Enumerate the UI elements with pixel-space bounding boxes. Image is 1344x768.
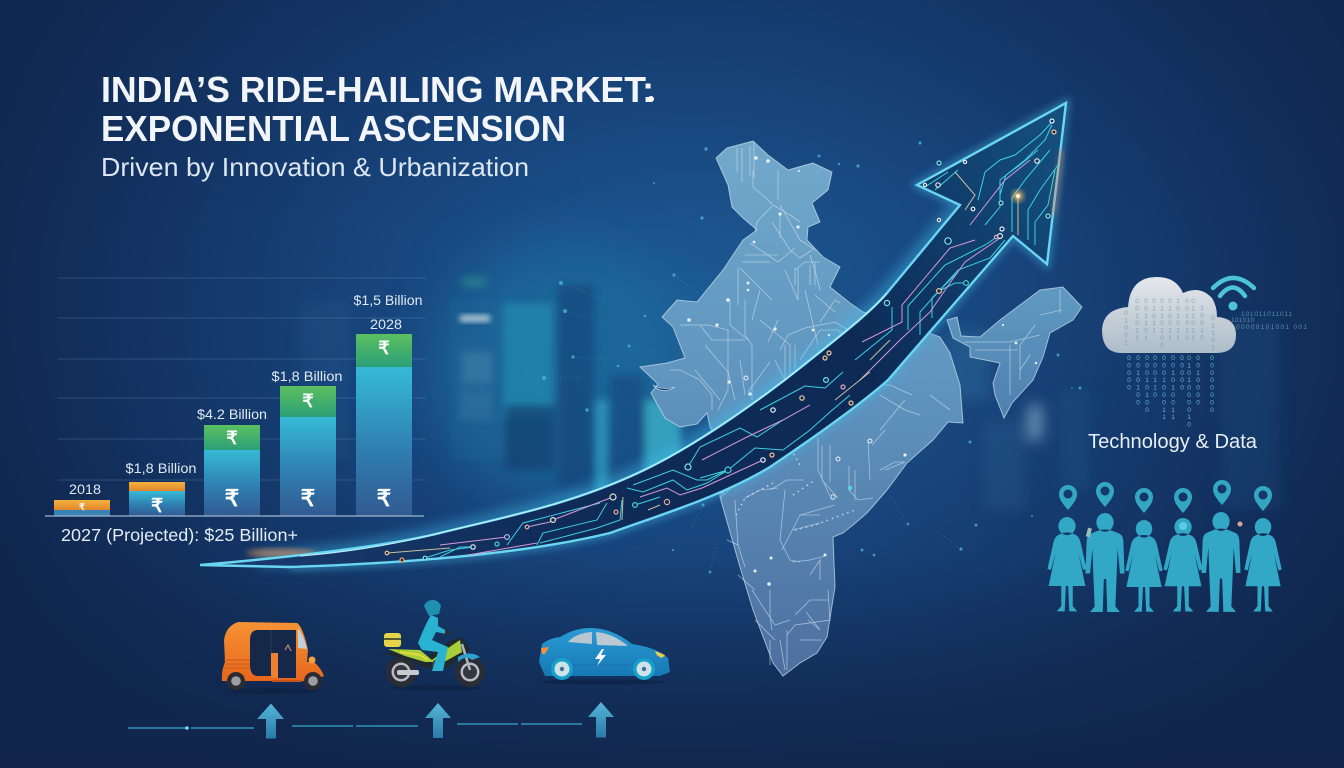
bar value labels: 2018 xyxy=(69,482,101,497)
map: north-east xyxy=(947,287,1082,418)
arrow up 2 xyxy=(425,703,451,738)
bar 3: ₹ xyxy=(225,485,240,511)
binary inside cloud: 010011 xyxy=(1166,298,1174,342)
binary inside cloud: 01101 xyxy=(1210,315,1216,352)
bar value labels: $4.2 Billion xyxy=(197,407,267,422)
bar 4: ₹ xyxy=(301,485,316,511)
arrow bright edge xyxy=(300,293,887,556)
bar value labels xyxy=(69,293,422,497)
bar 5: ₹ xyxy=(377,485,392,511)
binary rain: 00000 xyxy=(1178,355,1186,392)
bar 4: ₹ xyxy=(302,391,314,411)
arrow glow xyxy=(260,205,960,560)
arrow up 3 xyxy=(588,702,614,738)
arrow circuit nodes xyxy=(385,119,1056,562)
blurred city skyline xyxy=(300,240,1280,510)
progress line and arrows xyxy=(128,702,614,738)
map nodes xyxy=(687,156,1037,586)
map dashed routes xyxy=(736,430,855,530)
bar 5: ₹ xyxy=(378,338,390,358)
bar value labels: $1,8 Billion xyxy=(126,461,196,476)
orange flare xyxy=(1053,150,1062,215)
arrow circuit traces xyxy=(387,122,1058,558)
cloud and data icon xyxy=(1102,277,1307,429)
growth arrow xyxy=(200,103,1066,567)
location pins xyxy=(1059,480,1272,513)
bar 5 xyxy=(356,334,412,516)
technology label: Technology & Data xyxy=(1088,430,1258,453)
map: gulf xyxy=(653,385,675,391)
binary inside cloud: 011011 xyxy=(1190,298,1196,342)
binary rain: 0101000010 xyxy=(1186,355,1192,429)
bar 3: ₹ xyxy=(226,428,238,448)
binary inside cloud xyxy=(1122,298,1216,352)
binary rain: 0010000 xyxy=(1194,355,1202,407)
binary inside cloud: 001011 xyxy=(1134,298,1140,342)
binary rain: 00000000 xyxy=(1208,355,1216,414)
data bits: 00000101001 001 xyxy=(1236,324,1307,331)
binary rain: 00000 xyxy=(1126,355,1132,392)
orange tail flare xyxy=(246,549,318,557)
projection label: 2027 (Projected): $25 Billion+ xyxy=(61,525,298,545)
title: INDIA’S RIDE-HAILING MARKET: xyxy=(101,69,654,110)
binary inside cloud: 0110100 xyxy=(1158,298,1166,350)
map circuit traces xyxy=(670,142,950,670)
binary rain: 0010100 xyxy=(1134,355,1142,407)
binary rain: 001010011 xyxy=(1170,355,1176,422)
icon: motorbike with rider xyxy=(384,600,485,691)
binary rain xyxy=(1126,355,1216,429)
rider xyxy=(418,615,448,671)
binary rain: 000100011 xyxy=(1160,355,1168,422)
data bits: 101010 xyxy=(1231,317,1254,324)
subtitle: Driven by Innovation & Urbanization xyxy=(101,152,529,182)
map of India with circuit traces xyxy=(640,141,1082,676)
binary inside cloud: 001101 xyxy=(1142,298,1150,342)
bar 2018: ₹ xyxy=(79,502,85,512)
binary inside cloud: 10010 xyxy=(1198,305,1206,342)
icon: auto rickshaw xyxy=(222,622,324,694)
data bits xyxy=(1231,311,1307,331)
binary inside cloud: 01011 xyxy=(1150,298,1158,335)
map north-east traces xyxy=(965,290,1062,395)
binary inside cloud: 101011 xyxy=(1174,298,1182,342)
map: main landmass xyxy=(640,141,963,676)
bar 2 xyxy=(129,482,185,517)
people silhouettes xyxy=(1047,512,1282,612)
particle dots with trails xyxy=(542,96,1082,573)
glowing gold node xyxy=(1013,191,1023,201)
binary inside cloud: 001010 xyxy=(1184,298,1190,342)
cloud xyxy=(1102,277,1236,353)
arrow body xyxy=(200,103,1066,567)
binary rain: 000110 xyxy=(1152,355,1158,399)
bar chart: market growth xyxy=(45,278,426,517)
binary inside cloud: 01001 xyxy=(1122,310,1130,347)
arrow up 1 xyxy=(257,704,284,738)
data bits: 101011011011 xyxy=(1241,311,1292,318)
icon: electric car xyxy=(539,628,670,685)
bar 3 xyxy=(204,425,260,516)
wifi icon xyxy=(1213,278,1254,310)
bar value labels: $1,5 Billion xyxy=(354,293,422,308)
bar value labels: 2028 xyxy=(370,317,402,332)
title: EXPONENTIAL ASCENSION xyxy=(101,108,566,149)
bar 2: ₹ xyxy=(151,496,163,517)
binary rain: 00010100 xyxy=(1144,355,1150,414)
title xyxy=(101,69,654,149)
bar 4 xyxy=(280,386,336,516)
bar 2018 xyxy=(54,500,110,516)
bar value labels: $1,8 Billion xyxy=(272,369,342,384)
